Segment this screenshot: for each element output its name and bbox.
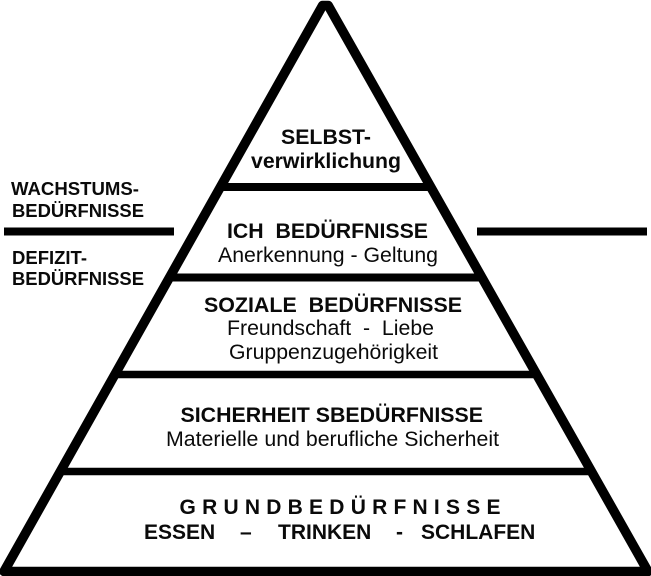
level 5: self-actualization: verwirklichung (251, 150, 401, 173)
level 2: safety needs: SICHERHEIT SBEDÜRFNISSE (180, 404, 483, 427)
level 3: social needs (204, 294, 462, 364)
side label: growth needs (11, 178, 144, 221)
right separator line (477, 228, 647, 236)
pyramid level dividers (60, 187, 591, 472)
level 1: basic needs: - (396, 521, 403, 544)
level 1: basic needs: ESSEN (144, 521, 215, 544)
side label: growth needs: BEDÜRFNISSE (12, 200, 144, 221)
level 2: safety needs: Materielle und berufliche Sicherheit (166, 428, 499, 451)
level 1: basic needs: SCHLAFEN (421, 521, 535, 544)
side label: deficit needs (12, 247, 144, 289)
level 5: self-actualization: SELBST- (281, 126, 371, 149)
side label: growth needs: WACHSTUMS- (11, 178, 139, 199)
side label: deficit needs: BEDÜRFNISSE (12, 268, 144, 289)
side label: deficit needs: DEFIZIT- (12, 247, 87, 268)
level 4: ego needs (218, 220, 438, 267)
level 1: basic needs: – (240, 521, 252, 544)
left separator line (4, 228, 174, 236)
level 4: ego needs: ICH BEDÜRFNISSE (227, 220, 428, 243)
level 1: basic needs (144, 496, 535, 544)
level 3: social needs: Freundschaft - Liebe (227, 317, 434, 340)
level 1: basic needs: TRINKEN (278, 521, 371, 544)
level 4: ego needs: Anerkennung - Geltung (218, 244, 438, 267)
level 5: self-actualization (251, 126, 401, 173)
level 3: social needs: Gruppenzugehörigkeit (229, 341, 438, 364)
level 3: social needs: SOZIALE BEDÜRFNISSE (204, 294, 462, 317)
level 2: safety needs (166, 404, 499, 451)
level 1: basic needs: GRUNDBEDÜRFNISSE (180, 496, 500, 519)
